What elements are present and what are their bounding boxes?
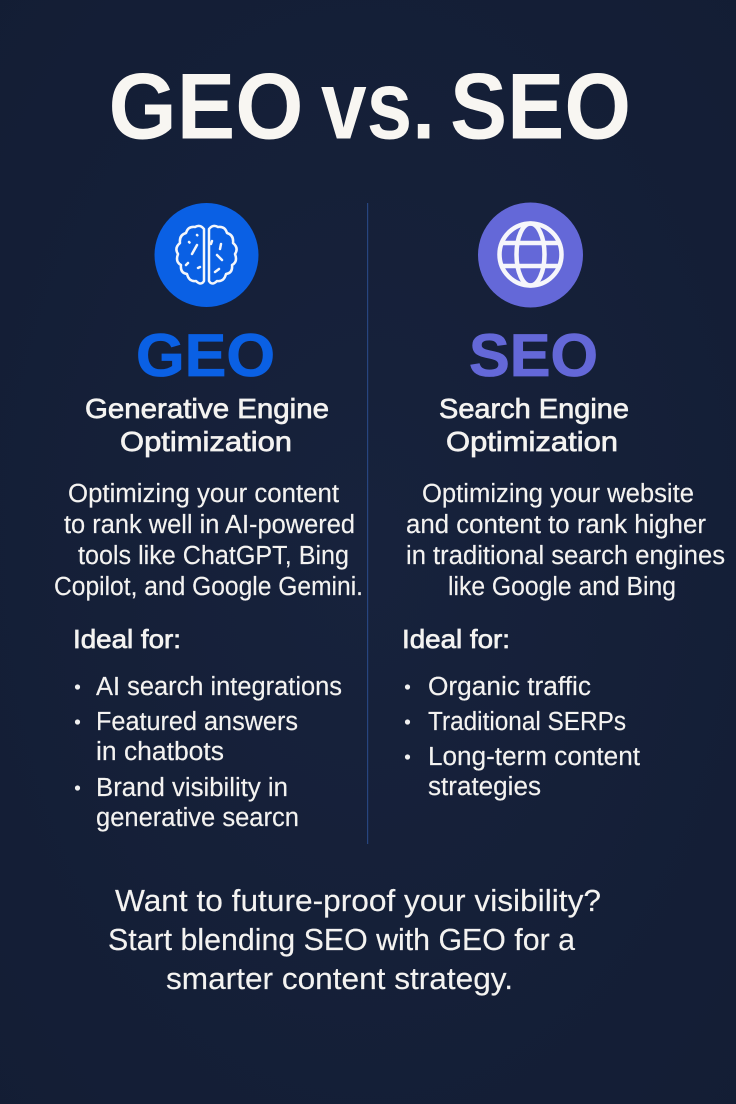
text block: SEO description xyxy=(406,480,725,601)
heading: Ideal for SEO: Ideal for: xyxy=(402,624,510,654)
text block: SEO description: Optimizing your website xyxy=(422,480,694,508)
text block: GEO description: tools like ChatGPT, Bing xyxy=(78,542,349,570)
subheading: Search Engine Optimization: Optimization xyxy=(446,426,618,457)
text block: GEO description: to rank well in AI-powered xyxy=(64,511,355,539)
heading: Ideal for GEO: Ideal for: xyxy=(73,624,181,654)
list: SEO ideal uses: strategies xyxy=(428,773,541,801)
divider between columns xyxy=(367,203,368,844)
list: SEO ideal uses: Traditional SERPs xyxy=(428,708,626,736)
panel: GEO column xyxy=(54,203,363,832)
text block: GEO description xyxy=(54,480,363,601)
callout: closing message xyxy=(108,883,601,996)
callout: closing message: Start blending SEO with GEO for a xyxy=(108,922,576,957)
subheading: Generative Engine Optimization xyxy=(85,393,329,457)
text block: SEO description: like Google and Bing xyxy=(448,573,676,601)
list: GEO ideal uses: Featured answers xyxy=(96,708,298,736)
icon: brain xyxy=(154,203,258,307)
panel: SEO column xyxy=(402,202,725,801)
list: GEO ideal uses: AI search integrations xyxy=(96,673,342,701)
heading: GEO: GEO xyxy=(136,322,275,389)
callout: closing message: Want to future-proof your visibility? xyxy=(115,883,601,918)
icon: globe xyxy=(478,202,583,308)
subheading: Generative Engine Optimization: Optimization xyxy=(120,426,292,457)
subheading: Search Engine Optimization: Search Engine xyxy=(439,393,629,424)
subheading: Search Engine Optimization xyxy=(439,393,629,457)
list: GEO ideal uses xyxy=(75,673,342,832)
title: vs. xyxy=(321,50,435,160)
title: SEO xyxy=(450,54,631,158)
list: GEO ideal uses: Brand visibility in xyxy=(96,774,288,802)
list: SEO ideal uses: Long-term content xyxy=(428,743,640,771)
title xyxy=(108,50,631,160)
text block: GEO description: Copilot, and Google Gemini. xyxy=(54,573,363,601)
callout: closing message: smarter content strategy. xyxy=(166,961,513,996)
heading: SEO: SEO xyxy=(469,322,598,389)
list: GEO ideal uses: in chatbots xyxy=(96,738,224,766)
title: GEO xyxy=(108,54,304,158)
subheading: Generative Engine Optimization: Generative Engine xyxy=(85,393,329,424)
list: GEO ideal uses: generative searcn xyxy=(96,804,299,832)
text block: SEO description: in traditional search engines xyxy=(406,542,725,570)
list: SEO ideal uses: Organic traffic xyxy=(428,673,591,701)
text block: GEO description: Optimizing your content xyxy=(68,480,339,508)
list: SEO ideal uses xyxy=(405,673,640,801)
text block: SEO description: and content to rank higher xyxy=(406,511,707,539)
